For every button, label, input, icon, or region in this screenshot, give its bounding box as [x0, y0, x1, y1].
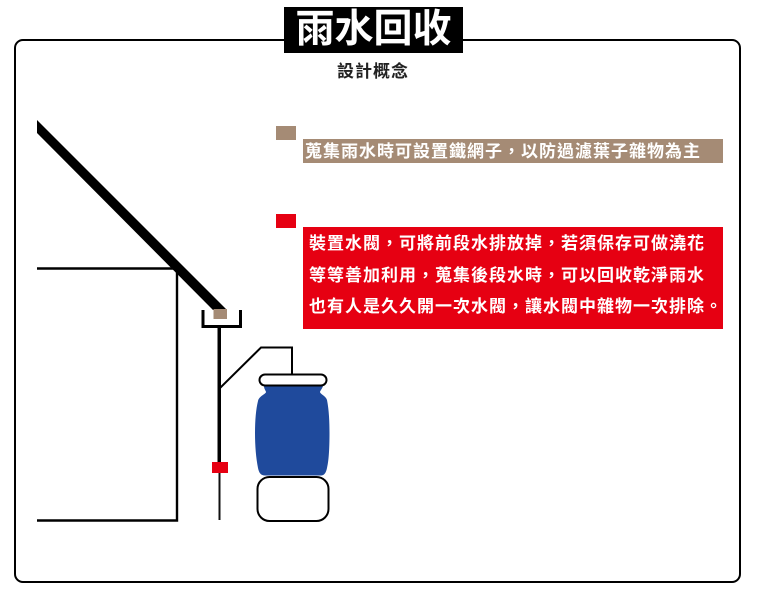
subtitle: 設計概念: [337, 62, 409, 81]
callout: leaf filter: [303, 139, 723, 163]
barrel base: [258, 477, 328, 521]
callout text: valve line 2: 等等善加利用，蒐集後段水時，可以回收乾淨雨水: [309, 266, 705, 284]
rain barrel: [255, 386, 330, 476]
house walls: [37, 268, 177, 520]
legend marker: red: [276, 214, 296, 228]
branch pipe to barrel: [220, 348, 292, 388]
valve marker: [212, 462, 228, 473]
barrel lid: [260, 374, 326, 386]
roof: [37, 120, 227, 310]
filter marker on gutter: [214, 309, 227, 319]
callout text: valve line 1: 裝置水閥，可將前段水排放掉，若須保存可做澆花: [309, 234, 705, 253]
downpipe lower: [218, 472, 220, 520]
callout text: leaf filter: 蒐集雨水時可設置鐵網子，以防過濾葉子雜物為主: [305, 142, 701, 160]
callout: water valve: [303, 227, 723, 329]
title: 雨水回收: [295, 8, 452, 51]
callout text: valve line 3: 也有人是久久開一次水閥，讓水閥中雜物一次排除。: [309, 297, 723, 316]
downpipe upper: [218, 328, 221, 463]
legend marker: brown: [276, 126, 296, 140]
gutter: [203, 310, 240, 326]
